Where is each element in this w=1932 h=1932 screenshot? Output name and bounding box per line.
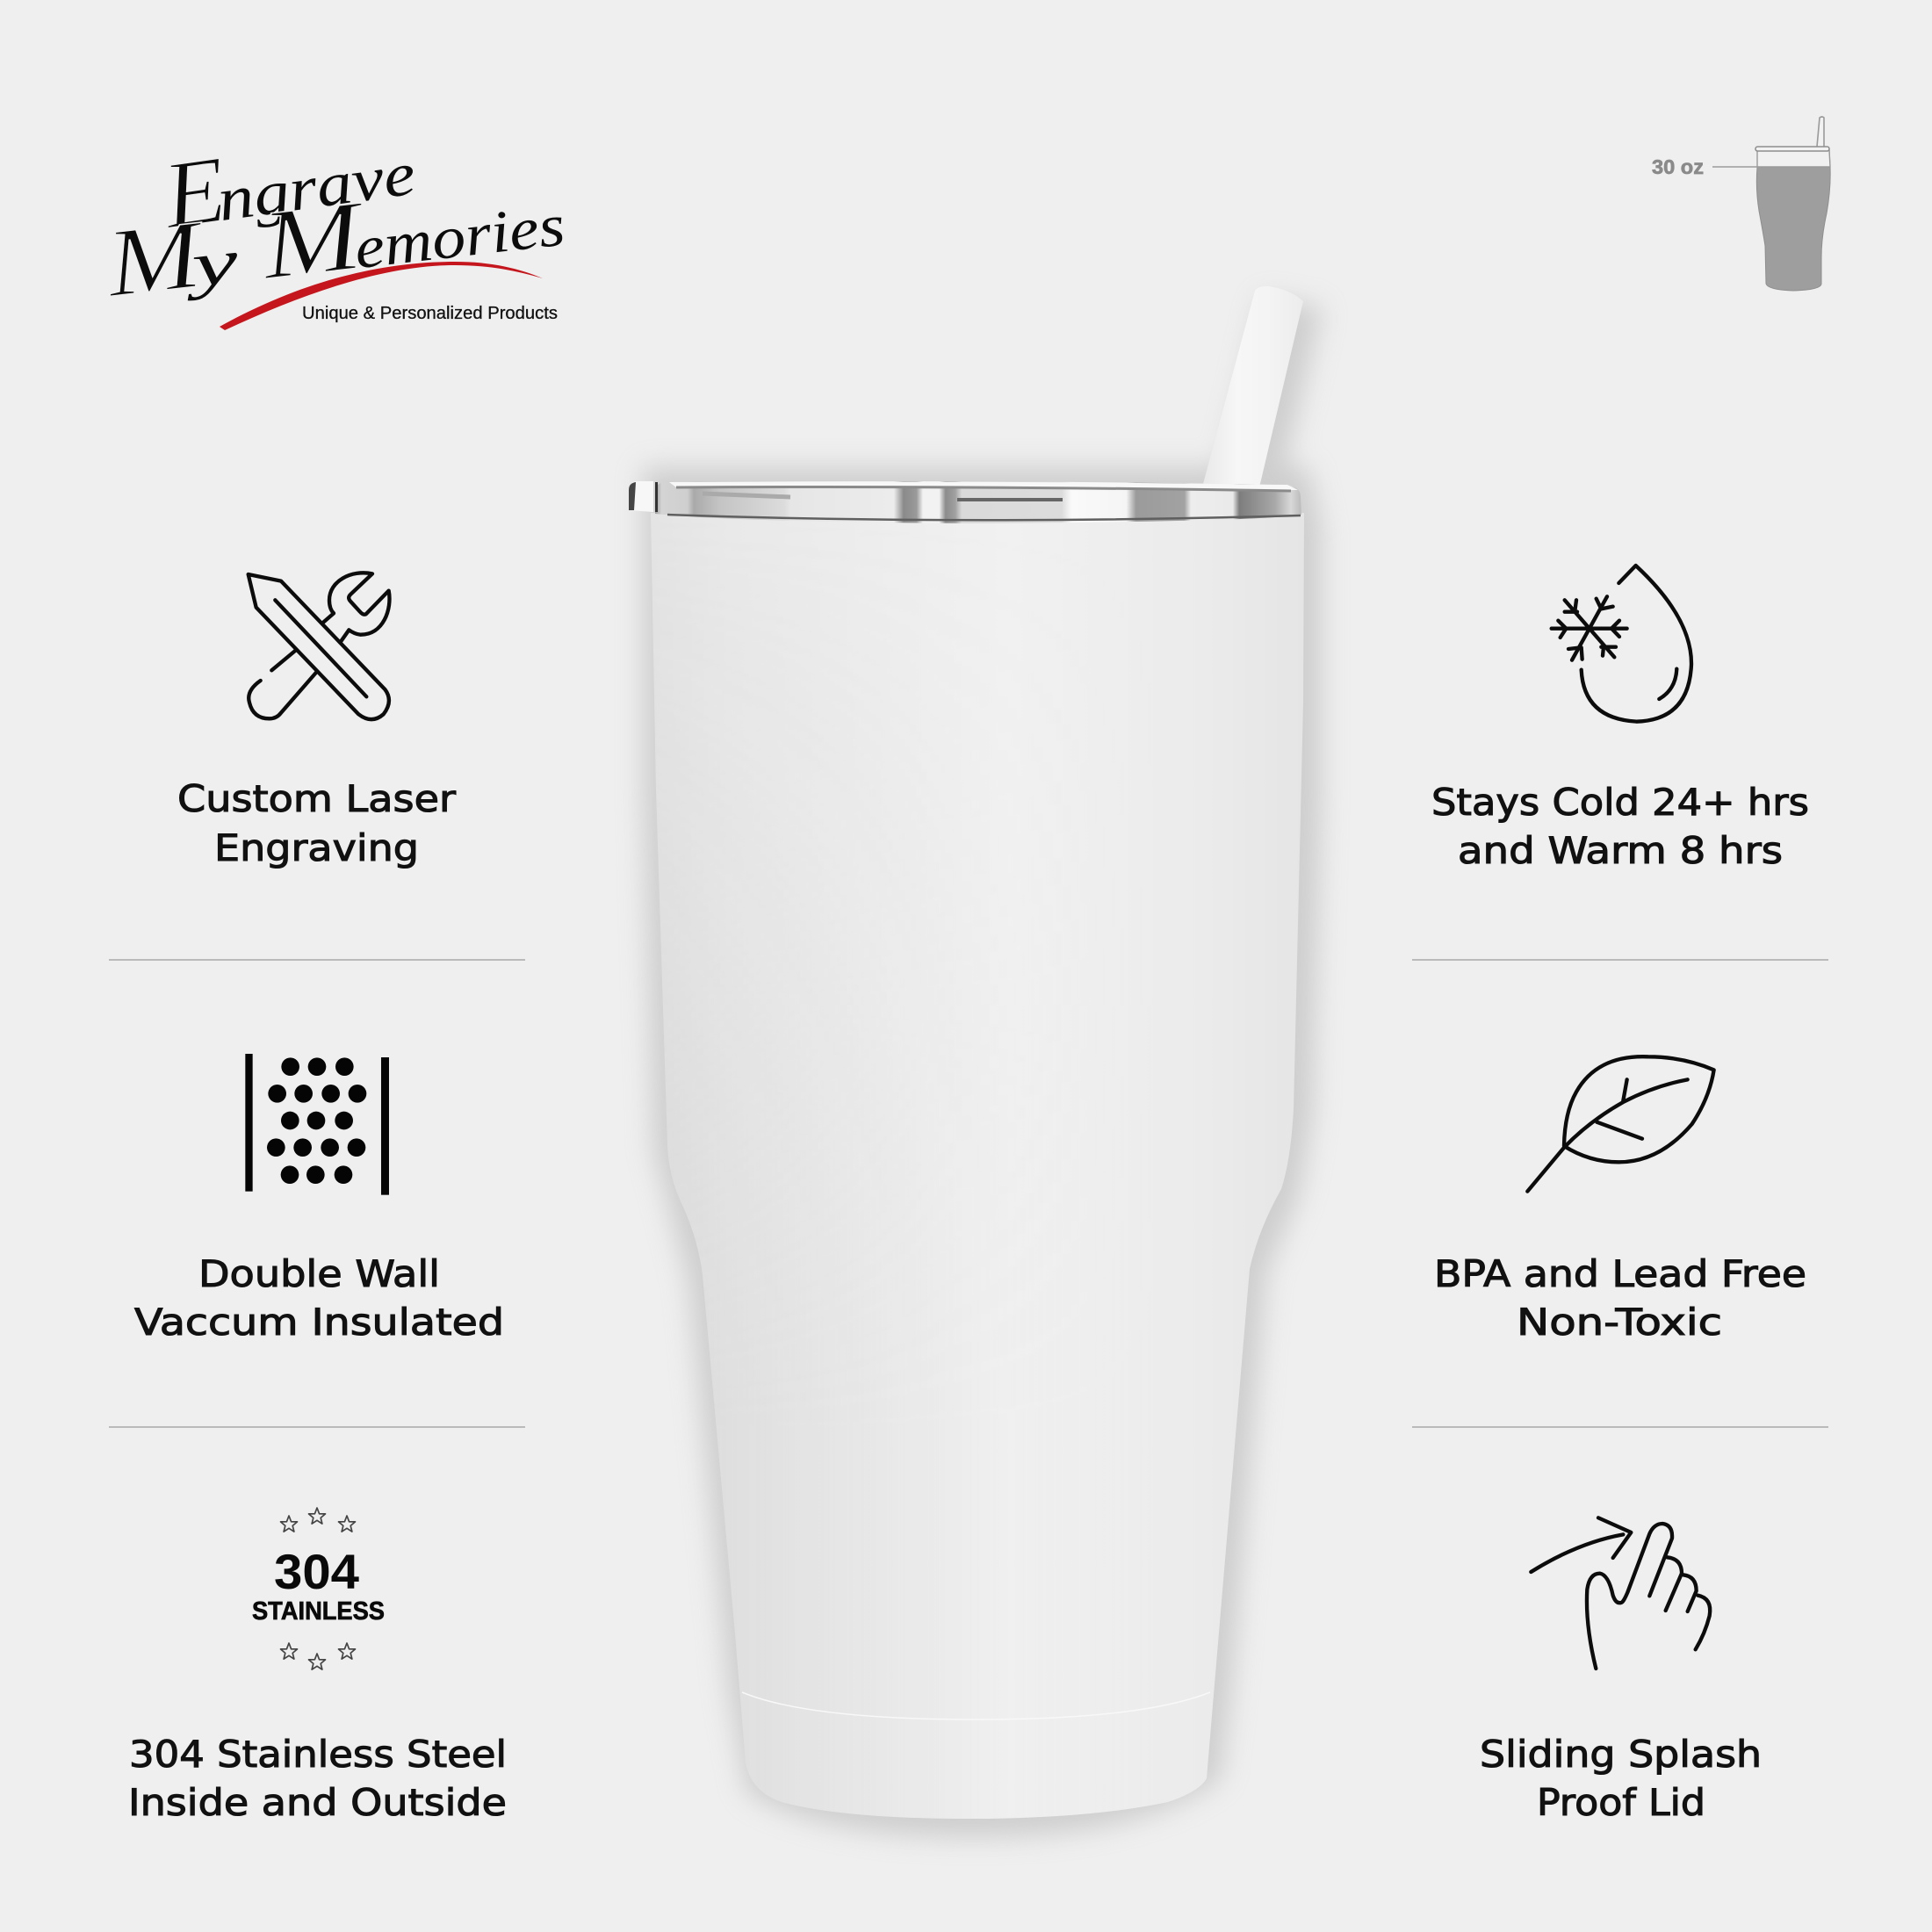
logo: Engrave My Memories: E [155,137,233,249]
label: 304 Stainless Steel [129,1733,507,1776]
label: Double Wall [198,1252,440,1295]
icon: water drop with snowflake [1552,566,1691,722]
label: Inside and Outside [128,1781,507,1824]
icon: crossed pen and wrench [249,573,389,719]
size indicator: 30 oz: 30 oz [1652,155,1704,178]
label: Sliding Splash [1480,1733,1762,1776]
logo: Engrave My Memories [99,111,569,330]
icon: leaf [1527,1056,1714,1192]
label [1480,1733,1762,1824]
sliding lid [655,481,1301,523]
feature: sliding lid [1480,1517,1762,1824]
icon: 304 stainless badge: STAINLESS [252,1597,385,1626]
label: BPA and Lead Free [1434,1252,1806,1295]
label: Custom Laser [177,777,457,820]
logo: Engrave My Memories: M [255,180,372,300]
label [1431,781,1809,872]
label [128,1733,507,1824]
label: Non-Toxic [1517,1301,1722,1344]
logo: Engrave My Memories: y [178,226,242,302]
label: Vaccum Insulated [134,1301,504,1344]
label: Stays Cold 24+ hrs [1431,781,1809,824]
icon: 304 stainless badge [252,1508,385,1669]
label: Engraving [214,826,419,869]
label: and Warm 8 hrs [1458,829,1783,872]
lid tab [629,481,653,512]
feature: custom laser engraving [177,573,457,869]
size indicator: 30 oz [1652,117,1830,291]
tumbler shadow [643,297,1323,1837]
logo: Engrave My Memories: emories [351,191,568,281]
label [177,777,457,869]
tumbler body [651,513,1304,1819]
logo: Engrave My Memories: ngrave [213,140,420,234]
icon: vacuum wall dots [245,1054,389,1195]
label: Proof Lid [1537,1781,1705,1824]
lower body shading [667,1101,811,1804]
feature: stays cold [1431,566,1809,872]
label [134,1252,504,1344]
tumbler product photo [629,286,1323,1837]
feature: double wall [134,1054,504,1344]
feature: BPA free [1434,1056,1806,1344]
base ring groove [742,1692,1210,1719]
straw [1203,286,1303,487]
logo: Engrave My Memories: Unique & Personalized Products [302,304,558,323]
label [1434,1252,1806,1344]
feature: 304 stainless [128,1508,507,1824]
logo: Engrave My Memories: M [99,199,212,317]
icon: 304 stainless badge: 304 [274,1544,359,1599]
icon: hand swipe with arrow [1531,1517,1710,1669]
